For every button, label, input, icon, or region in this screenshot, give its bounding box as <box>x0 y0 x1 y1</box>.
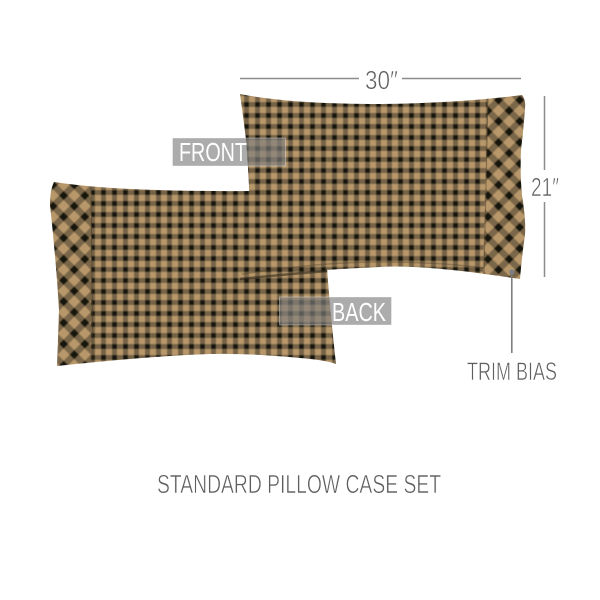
dimension: width 30 inches: 30″ <box>365 65 398 95</box>
dimension: height 21 inches: 21″ <box>531 172 559 202</box>
label: BACK: BACK <box>332 297 386 327</box>
trim: front pillow cuff <box>482 95 526 279</box>
pillow: back <box>50 182 336 366</box>
label: TRIM BIAS: TRIM BIAS <box>467 358 557 386</box>
label: BACK <box>280 297 392 327</box>
label: FRONT: FRONT <box>179 137 247 167</box>
caption: product name: STANDARD PILLOW CASE SET <box>157 469 441 499</box>
trim: back pillow cuff <box>50 182 92 366</box>
callout: trim bias leader line <box>509 270 514 353</box>
pillow: front <box>235 90 530 285</box>
